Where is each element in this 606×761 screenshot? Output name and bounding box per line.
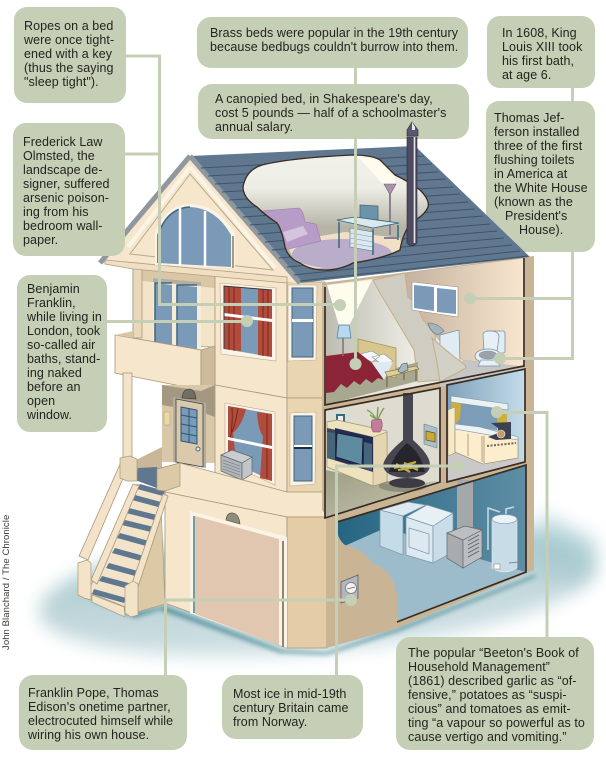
callout: ice from Norway: century Britain came	[233, 701, 349, 715]
callout: Thomas Jefferson: the White House	[494, 181, 588, 195]
callout: Beeton's book: (1861) described garlic as “of-	[408, 674, 577, 688]
callout: Thomas Jefferson: ferson installed	[494, 125, 579, 139]
upper left double window	[153, 278, 201, 350]
callout: Frederick Law Olmsted: arsenic poison-	[23, 191, 109, 205]
callout: ropes on a bed: (thus the saying	[24, 61, 114, 75]
air conditioner	[221, 450, 252, 480]
callout: Benjamin Franklin: so-called air	[27, 338, 95, 352]
bedspread	[326, 352, 384, 393]
bedroom lamp	[337, 325, 351, 356]
callout: Benjamin Franklin: open	[27, 394, 55, 408]
upper right window	[288, 285, 317, 361]
callout: Frederick Law Olmsted	[13, 123, 125, 256]
plaster lower strip	[432, 338, 466, 382]
garage door	[190, 511, 287, 648]
bathroom peach wall	[405, 258, 524, 367]
callout: ropes on a bed: "sleep tight").	[24, 75, 99, 89]
callout: Benjamin Franklin: baths, stand-	[27, 352, 100, 366]
entertainment unit	[327, 420, 387, 486]
centre bay upper wall	[215, 274, 287, 398]
upper red curtain window	[220, 283, 276, 361]
ground floor side wall	[287, 517, 327, 648]
bedroom and bathroom floor	[325, 258, 525, 405]
callout: Beeton's book: fensive,” potatoes as “suspi-	[408, 688, 567, 702]
callout: ropes on a bed: ened with a key	[24, 47, 113, 61]
balcony	[115, 331, 215, 390]
callout: Frederick Law Olmsted: bedroom wall-	[23, 219, 103, 233]
callout: Thomas Jefferson: (known as the	[494, 195, 573, 209]
callout: ice from Norway	[222, 675, 363, 739]
door window	[181, 407, 197, 444]
lamp light cone	[327, 280, 372, 326]
roof	[190, 146, 530, 283]
side cabinet	[448, 407, 455, 456]
callout: Benjamin Franklin: before an	[27, 380, 81, 394]
valance	[451, 396, 508, 410]
stair treads	[92, 484, 165, 603]
desk	[337, 205, 399, 255]
callout: brass beds	[197, 17, 468, 68]
callout: Beeton's book: The popular “Beeton's Book of	[408, 646, 579, 660]
callout: Louis XIII: In 1608, King	[502, 26, 577, 40]
lower right wall	[287, 398, 325, 492]
lower right window	[290, 412, 316, 486]
callout: Benjamin Franklin: Franklin,	[27, 296, 76, 310]
nightstand	[385, 366, 419, 387]
callout: canopied bed: cost 5 pounds — half of a schoolmaster's	[215, 106, 446, 120]
furnace	[447, 480, 482, 568]
headboard	[358, 339, 396, 378]
shingle lines	[201, 156, 528, 281]
cabinets	[455, 424, 518, 464]
porch post	[123, 373, 132, 463]
chimney pipe	[407, 122, 418, 246]
entry ledge	[157, 463, 325, 517]
callout: Frederick Law Olmsted: Olmsted, the	[23, 149, 95, 163]
callout: canopied bed: A canopied bed, in Shakespeare's day,	[215, 92, 433, 106]
gable	[100, 156, 300, 283]
plant vase	[367, 407, 384, 432]
callout: Frederick Law Olmsted: signer, suffered	[23, 177, 110, 191]
callout: Thomas Jefferson: President's	[505, 209, 567, 223]
basement	[325, 465, 526, 648]
callout: Franklin Pope: Edison's onetime partner,	[28, 700, 171, 714]
callout: brass beds: because bedbugs couldn't burrow into them.	[210, 40, 458, 54]
callout: Louis XIII: Louis XIII took	[502, 40, 583, 54]
callout: Benjamin Franklin: London, took	[27, 324, 101, 338]
kitchen floor	[447, 452, 525, 482]
callout: ropes on a bed: Ropes on a bed	[24, 19, 113, 33]
callout: canopied bed: annual salary.	[215, 120, 293, 134]
bedroom floor	[325, 362, 418, 405]
fireplace	[379, 393, 430, 492]
electric meter	[341, 575, 358, 603]
living room	[325, 388, 440, 518]
sofa	[262, 208, 321, 250]
upper porch wall	[133, 265, 215, 347]
lower red curtain window	[225, 403, 275, 485]
callout: Frederick Law Olmsted: paper.	[23, 233, 58, 247]
callout: Louis XIII: at age 6.	[502, 68, 551, 82]
pillows	[357, 351, 393, 366]
basement wall cover	[325, 517, 398, 648]
curtains	[451, 402, 461, 424]
plaster middle wall	[373, 273, 440, 382]
callout: brass beds: Brass beds were popular in the 19th century	[210, 26, 459, 40]
garage lamp	[226, 513, 240, 524]
leader lines and dots	[107, 56, 572, 675]
bedroom back wall	[325, 280, 418, 400]
callout: canopied bed	[198, 84, 469, 139]
callout: Benjamin Franklin: window.	[26, 408, 72, 422]
gable arched window	[155, 204, 235, 268]
coffee maker	[488, 422, 511, 440]
callout: Franklin Pope: wiring his own house.	[27, 728, 149, 742]
staircase	[78, 456, 180, 617]
callout: Benjamin Franklin: while living in	[26, 310, 102, 324]
callout: Thomas Jefferson	[486, 101, 595, 252]
callout: Beeton's book: cause vertigo and vomiting.”	[408, 730, 567, 744]
wall panel	[424, 424, 437, 448]
callout: Thomas Jefferson: Thomas Jef-	[494, 111, 564, 125]
callout: Thomas Jefferson: House).	[519, 223, 563, 237]
kitchen	[447, 369, 525, 482]
attic cutaway	[242, 154, 429, 271]
callout: Louis XIII	[487, 16, 595, 88]
picture frame	[336, 414, 345, 425]
callout: Frederick Law Olmsted: Frederick Law	[23, 135, 103, 149]
toilet	[475, 331, 505, 366]
callout: Franklin Pope: Franklin Pope, Thomas	[28, 686, 159, 700]
callout: Benjamin Franklin: ing naked	[27, 366, 82, 380]
callout: Benjamin Franklin: Benjamin	[27, 282, 80, 296]
ground shadow wash	[33, 500, 603, 676]
telephone	[398, 363, 408, 373]
callout: ice from Norway: from Norway.	[233, 715, 307, 729]
callout: ropes on a bed	[14, 7, 126, 103]
rug	[292, 239, 392, 269]
callout: Frederick Law Olmsted: ing from his	[23, 205, 89, 219]
kitchen window	[455, 401, 497, 430]
dryer	[406, 505, 453, 563]
bathroom floor	[440, 360, 524, 387]
callout: Beeton's book: Household Management”	[408, 660, 550, 674]
door recess	[132, 385, 215, 478]
bathroom window	[412, 282, 458, 317]
ground floor front wall	[165, 492, 287, 648]
callout: ice from Norway: Most ice in mid-19th	[233, 687, 346, 701]
room outlines	[325, 258, 526, 622]
cutaway wall section	[322, 256, 534, 648]
callout: Beeton's book: cious” and tomatoes as emit-	[408, 702, 571, 716]
callout: Beeton's book: ting “a vapour so powerful as to	[408, 716, 585, 730]
callout: Benjamin Franklin	[17, 275, 107, 432]
callout: Frederick Law Olmsted: landscape de-	[23, 163, 103, 177]
washer	[380, 502, 426, 555]
house illustration	[78, 146, 534, 648]
callout: Thomas Jefferson: three of the first	[494, 139, 583, 153]
callout: Franklin Pope	[19, 675, 187, 750]
callout: Beeton's book	[396, 637, 594, 750]
porch lamp	[182, 389, 196, 399]
callout: Louis XIII: his first bath,	[502, 54, 574, 68]
callout: Thomas Jefferson: flushing toilets	[494, 153, 574, 167]
callout: ropes on a bed: were once tight-	[23, 33, 114, 47]
floor lamp	[384, 184, 397, 238]
water heater	[488, 507, 519, 572]
shaded band under gable	[133, 268, 215, 288]
lower centre wall	[215, 385, 287, 492]
callout: Franklin Pope: electrocuted himself while	[28, 714, 173, 728]
callout: Thomas Jefferson: in America at	[494, 167, 568, 181]
bathroom sink	[428, 323, 460, 363]
right bay upper wall	[287, 282, 325, 398]
credit: John Blanchard / The Chronicle	[1, 515, 12, 650]
